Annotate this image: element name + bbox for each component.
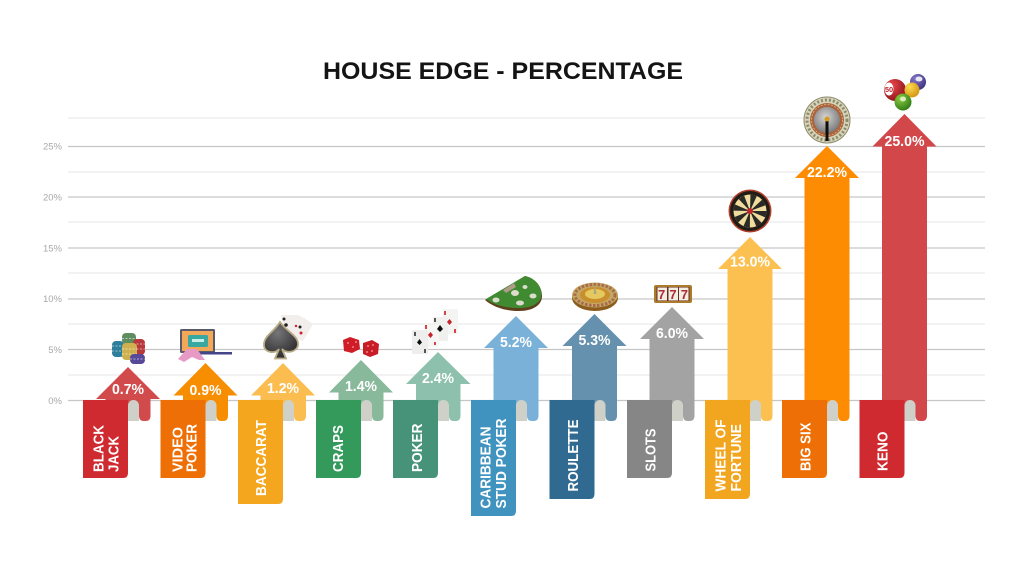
y axis labels: 0% [48,396,63,407]
label text: CARIBBEAN [478,426,494,508]
label tab [238,400,283,504]
icon: red dice [343,337,379,357]
fold [904,400,916,421]
arrow: 5.2% [484,316,548,421]
value: 5.2% [500,334,532,351]
icon: playing cards [412,309,458,354]
column: Baccarat [238,363,315,504]
icon: keno balls: 50 [885,85,893,94]
y axis labels: 20% [43,192,63,204]
label text [712,420,745,492]
value: 0.7% [112,381,144,398]
arrow: 1.4% [329,360,393,421]
column: Video Poker [160,363,238,478]
column: Wheel of Fortune [705,237,782,499]
column: Roulette [550,314,626,499]
column: Black Jack [83,367,160,478]
value: 13.0% [730,254,770,270]
y axis labels: 25% [43,142,63,152]
icon: spade and cards [264,315,313,358]
arrow: 22.2% [795,146,859,421]
label text: POKER [184,424,200,472]
label tab [860,400,904,478]
fold [283,400,294,421]
arrow: 0.9% [174,363,238,421]
label text: SLOTS [642,428,660,472]
label tab [316,400,361,478]
arrow: 6.0% [640,307,704,421]
label text [170,424,200,472]
label text: BIG SIX [798,422,814,471]
arrow: 25.0% [872,114,936,421]
label text: CRAPS [330,425,347,472]
value: 1.2% [267,380,299,397]
fold [361,400,372,421]
label tab [627,400,672,478]
fold [827,400,838,421]
fold [128,400,139,421]
fold [516,400,527,421]
label tab [471,400,516,516]
icon: roulette wheel top view [804,97,850,143]
y axis labels: 5% [48,345,63,356]
column: Slots [627,307,704,478]
value: 25.0% [884,133,924,150]
arrow: 5.3% [562,314,626,421]
arrow: 2.4% [406,352,470,421]
y axis labels [43,142,63,407]
label text: STUD POKER [493,418,510,508]
fold [594,400,606,421]
icon: wheel of fortune [728,190,772,232]
y axis labels: 10% [43,294,63,305]
column: Big Six [782,146,859,478]
label text [478,418,510,508]
label text: KENO [874,431,892,471]
label text: ROULETTE [565,420,582,492]
icon: slot machine 777 [654,285,692,303]
label tab [393,400,438,478]
label text: POKER [409,423,426,472]
label text [90,425,122,472]
fold [672,400,683,421]
column: Craps [316,360,393,478]
label text: BACCARAT [253,420,270,496]
label text: JACK [106,436,122,472]
label tab [160,400,206,478]
arrow: 0.7% [96,367,160,421]
value: 2.4% [422,370,454,387]
value: 1.4% [345,378,377,395]
fold [206,400,216,421]
fold [750,400,761,421]
icon: laptop with chips [178,329,232,362]
icon: card table [485,276,542,311]
column: Poker [393,352,470,478]
label tab [550,400,594,499]
label tab [83,400,128,478]
icon: poker chips [112,333,145,364]
icon: slot machine 777: 777 [658,287,688,302]
label tab [782,400,827,478]
column: Keno [860,114,936,478]
y axis labels: 15% [43,244,63,254]
value: 0.9% [190,382,222,399]
icon: roulette wheel angled [572,282,618,311]
icon: keno balls [884,74,926,110]
label text: VIDEO [170,427,186,472]
arrow: 13.0% [718,237,782,421]
column: Caribbean Stud Poker [471,316,548,516]
value: 22.2% [807,164,847,181]
label tab [705,400,750,499]
label text: WHEEL OF [712,420,730,492]
label text: FORTUNE [728,424,745,492]
arrow: 1.2% [251,363,315,421]
label text: BLACK [90,425,108,472]
title: HOUSE EDGE - PERCENTAGE [323,58,683,85]
value: 6.0% [656,325,688,342]
fold [438,400,449,421]
value: 5.3% [578,332,610,349]
